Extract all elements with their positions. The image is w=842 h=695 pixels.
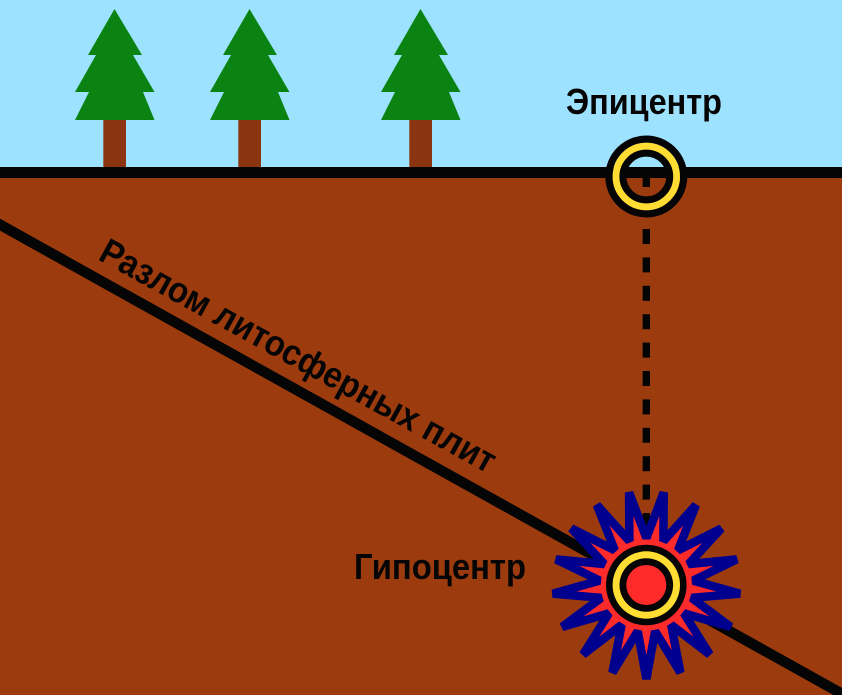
fault line [0,219,842,695]
epicenter marker [609,139,684,214]
hypocenter burst [553,492,740,679]
tree 3 [381,9,460,170]
tree 1 [75,9,154,170]
ground [0,172,842,695]
hypocenter label: Гипоцентр [354,546,526,587]
sky [0,0,842,172]
fault label: Разлом литосферных плит [93,230,504,481]
hypocenter marker [606,545,687,625]
dashed vertical line from epicenter to hypocenter [643,176,650,531]
ground surface line [0,167,842,178]
epicenter label: Эпицентр [566,81,722,122]
tree 2 [210,9,290,170]
